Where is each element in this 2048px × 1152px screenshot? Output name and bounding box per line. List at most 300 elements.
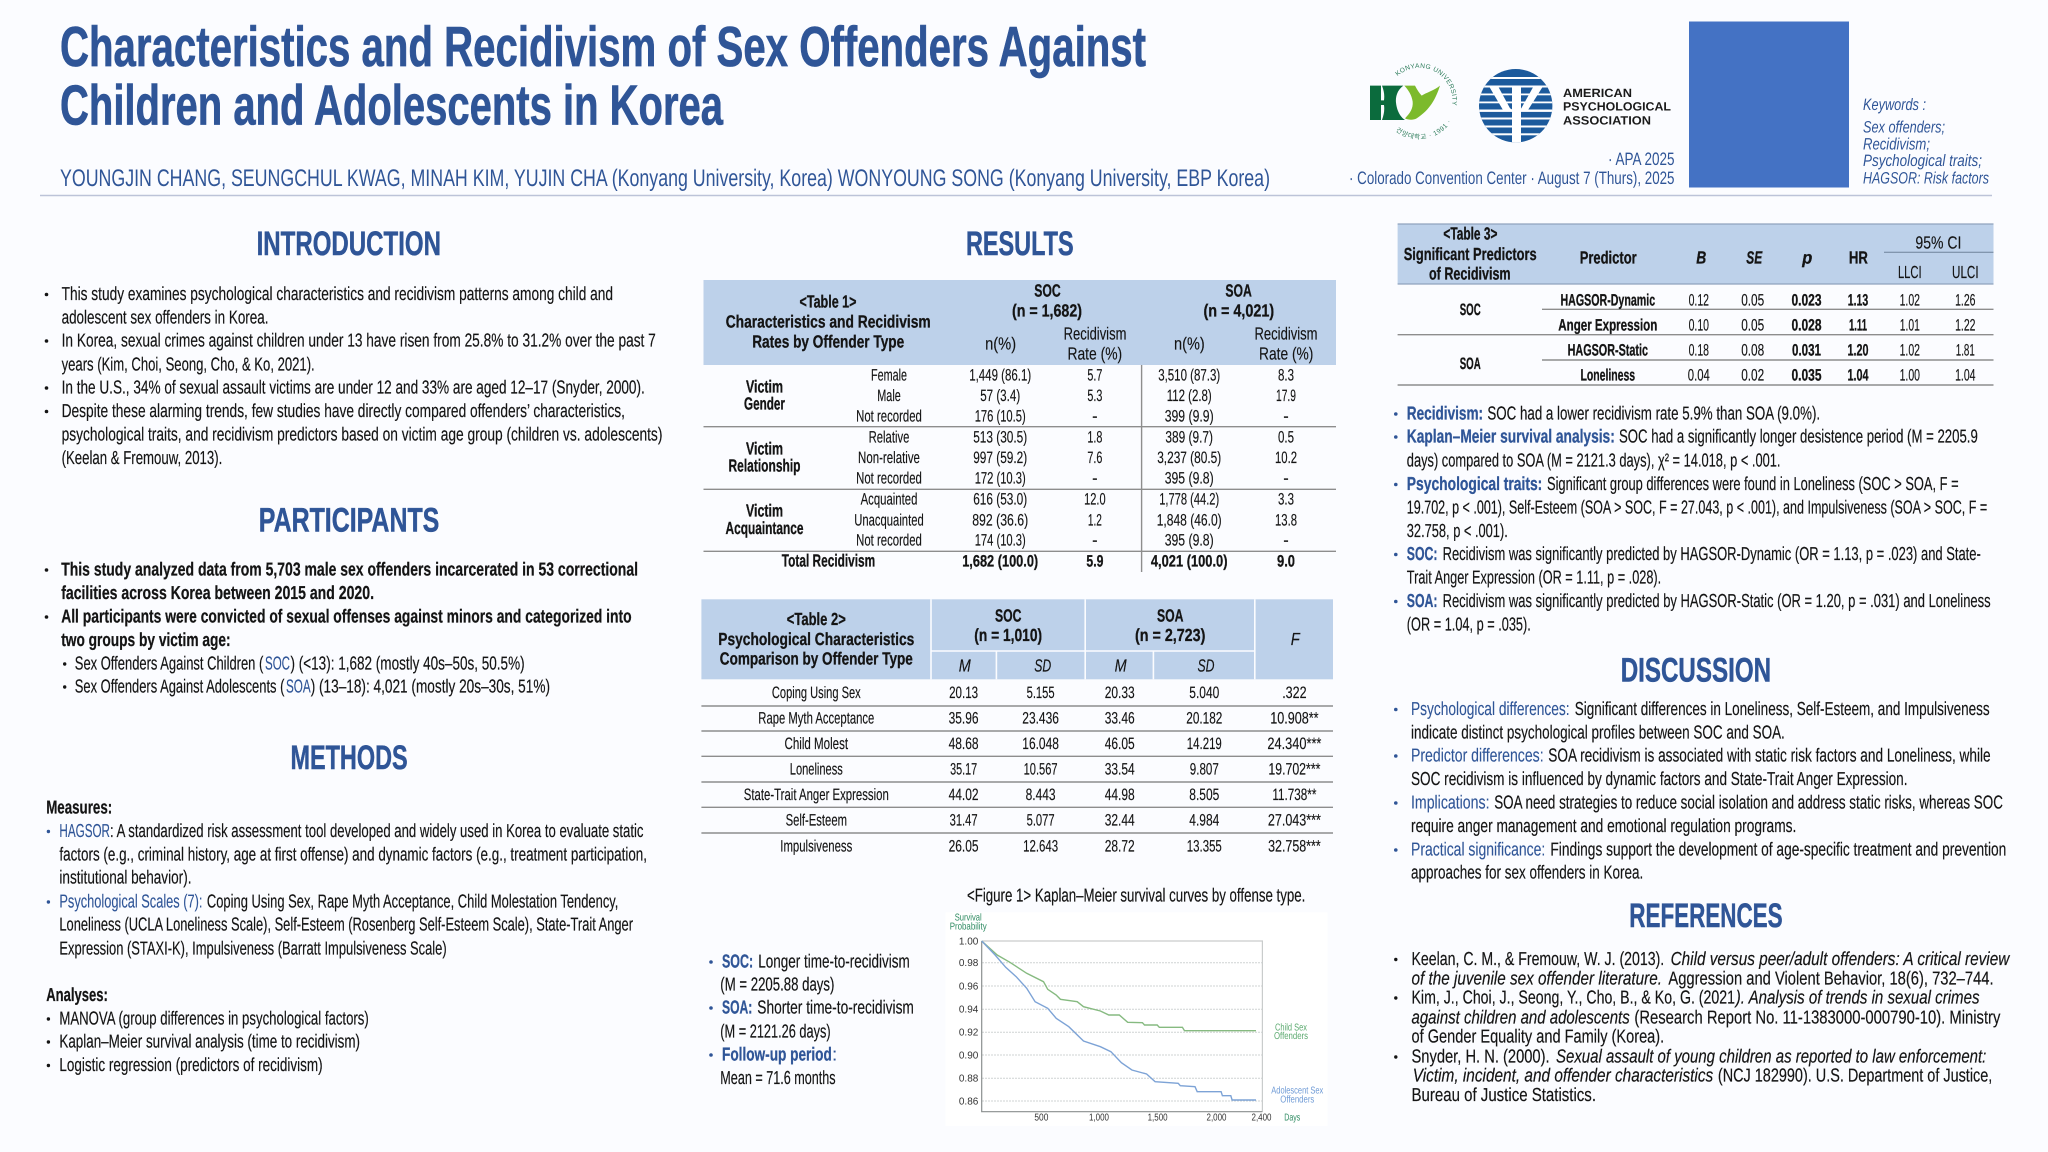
table 2: psychological characteristics comparison: 5.077	[1027, 812, 1055, 830]
text block: participants bullets: ) (13–18): 4,021 (mostly 20s–30s, 51%)	[311, 676, 550, 697]
table 2: psychological characteristics comparison: 28.72	[1105, 837, 1135, 855]
text block: measures: Psychological Scales (7):	[59, 890, 203, 911]
keywords: Recidivism;	[1863, 136, 1930, 154]
text block: analyses: Logistic regression (predictors of recidivism)	[59, 1054, 323, 1075]
text block: participants bullets: SOC	[265, 652, 290, 673]
text block: introduction bullets	[45, 283, 662, 468]
table 1: characteristics and recidivism rates: 174 (10.3)	[975, 532, 1026, 550]
table 1: characteristics and recidivism rates: 1.2	[1088, 511, 1102, 529]
table 1: characteristics and recidivism rates: Non-relative	[858, 449, 920, 467]
table 3: significant predictors of recidivism: 95% CI	[1915, 232, 1961, 252]
title: Characteristics and Recidivism of Sex Offenders Against	[60, 15, 1146, 78]
icon: Konyang University logo	[1370, 63, 1457, 140]
table 3: significant predictors of recidivism: ULCI	[1952, 262, 1979, 282]
table 1: characteristics and recidivism rates: Victim	[746, 439, 783, 459]
text block: analyses	[46, 984, 369, 1075]
text block: participants bullets	[45, 559, 638, 697]
table 3: significant predictors of recidivism: 1.11	[1849, 316, 1867, 334]
text block: survival summary: SOC:	[722, 950, 753, 971]
table 2: psychological characteristics comparison	[701, 599, 1333, 855]
table 1: characteristics and recidivism rates: Not recorded	[856, 470, 922, 488]
table 2: psychological characteristics comparison: 26.05	[949, 837, 979, 855]
table 1: characteristics and recidivism rates: Male	[877, 387, 901, 405]
table 1: characteristics and recidivism rates: Recidivism	[1254, 323, 1318, 343]
text block: results bullets: Psychological traits:	[1407, 473, 1542, 494]
text block: discussion bullets	[1394, 698, 2006, 883]
table 3: significant predictors of recidivism: 0.035	[1792, 367, 1822, 385]
keywords	[1863, 96, 1989, 187]
table 3: significant predictors of recidivism: 0.12	[1689, 291, 1709, 309]
keywords: Sex offenders;	[1863, 119, 1945, 137]
table 2: psychological characteristics comparison: State-Trait Anger Expression	[744, 786, 889, 804]
table 1: characteristics and recidivism rates: -	[1092, 532, 1098, 550]
table 1: characteristics and recidivism rates: 892 (36.6)	[972, 511, 1028, 529]
table 2: psychological characteristics comparison: Coping Using Sex	[772, 684, 861, 702]
series label: child sex offenders: Offenders	[1274, 1031, 1308, 1042]
green curve: child sex offenders	[982, 941, 1256, 1031]
table 3: significant predictors of recidivism: <Table 3>	[1443, 223, 1497, 243]
text block: measures: factors (e.g., criminal history, age at first offense) and dynamic factors (e.g., treatment participation,	[59, 843, 647, 864]
table 1: characteristics and recidivism rates: Unacquainted	[854, 511, 924, 529]
table 1: characteristics and recidivism rates: Female	[871, 366, 907, 384]
text block: results bullets: Kaplan–Meier survival analysis:	[1407, 426, 1615, 447]
table 2: psychological characteristics comparison: SD	[1034, 655, 1051, 675]
table 1: characteristics and recidivism rates: Victim	[746, 501, 783, 521]
table 2: psychological characteristics comparison: 9.807	[1190, 761, 1219, 779]
icon: American Psychological Association logo: ASSOCIATION	[1563, 114, 1651, 128]
table 2: psychological characteristics comparison: 48.68	[949, 735, 979, 753]
text block: participants bullets: ) (<13): 1,682 (mostly 40s–50s, 50.5%)	[290, 652, 525, 673]
table 1: characteristics and recidivism rates: 0.5	[1278, 428, 1294, 446]
icon: Konyang University logo: 건양대학교 · 1991 ·	[1396, 121, 1450, 140]
table 1: characteristics and recidivism rates: -	[1092, 470, 1098, 488]
table 3: significant predictors of recidivism: 0.04	[1688, 367, 1710, 385]
table 2: psychological characteristics comparison: 8.505	[1189, 786, 1219, 804]
table 1: characteristics and recidivism rates: 1,778 (44.2)	[1159, 490, 1219, 508]
table 2: psychological characteristics comparison: F	[1291, 629, 1301, 649]
figure caption: <Figure 1> Kaplan–Meier survival curves by offense type.	[967, 885, 1305, 906]
text block: measures: Coping Using Sex, Rape Myth Acceptance, Child Molestation Tendency,	[207, 890, 618, 911]
y axis labels: 0.96	[959, 982, 979, 992]
blue curve: adolescent sex offenders	[982, 941, 1256, 1100]
text block: participants bullets: Sex Offenders Against Children (	[75, 652, 264, 673]
table 2: psychological characteristics comparison: M	[1115, 655, 1127, 675]
series label: adolescent sex offenders	[1271, 1086, 1323, 1105]
table 1: characteristics and recidivism rates: 3,510 (87.3)	[1158, 366, 1220, 384]
table 3: significant predictors of recidivism: LLCI	[1898, 262, 1922, 282]
table 1: characteristics and recidivism rates: Recidivism	[1064, 323, 1126, 343]
text block: survival summary: Follow-up period	[722, 1044, 832, 1065]
table 3: significant predictors of recidivism: HAGSOR-Dynamic	[1560, 291, 1655, 309]
table 3: significant predictors of recidivism: 0.08	[1741, 342, 1764, 360]
table 3: significant predictors of recidivism: SOC	[1460, 301, 1481, 319]
table 2: psychological characteristics comparison: SD	[1198, 655, 1215, 675]
authors: YOUNGJIN CHANG, SEUNGCHUL KWAG, MINAH KIM, YUJIN CHA (Konyang University, Korea) WONYOUNG SONG (Konyang University, EBP Korea)	[60, 165, 1270, 192]
series label: child sex offenders	[1274, 1022, 1308, 1042]
x axis labels	[1034, 1113, 1300, 1124]
table 1: characteristics and recidivism rates: -	[1283, 408, 1289, 426]
table 3: significant predictors of recidivism: 0.05	[1741, 291, 1764, 309]
text block: discussion bullets: Psychological differences:	[1411, 698, 1570, 719]
table 2: psychological characteristics comparison: (n = 1,010)	[974, 625, 1042, 645]
table 1: characteristics and recidivism rates: 616 (53.0)	[973, 490, 1027, 508]
table 2: psychological characteristics comparison: 33.46	[1105, 709, 1135, 727]
blue rectangle placeholder	[1689, 22, 1849, 188]
table 2: psychological characteristics comparison: SOC	[995, 606, 1022, 626]
table 2: psychological characteristics comparison: 35.96	[949, 709, 979, 727]
text block: reference list: against children and adolescents	[1412, 1006, 1630, 1027]
heading: introduction: INTRODUCTION	[257, 225, 441, 263]
text block: results bullets: days) compared to SOA (M = 2121.3 days), χ² = 14.018, p < .001.	[1407, 449, 1780, 470]
text block: reference list: of Gender Equality and Family (Korea).	[1412, 1026, 1664, 1047]
y axis labels	[959, 936, 979, 1108]
table 3: significant predictors of recidivism: SOA	[1460, 355, 1481, 373]
table 3: significant predictors of recidivism: 1.81	[1956, 342, 1975, 360]
heading: participants: PARTICIPANTS	[259, 502, 439, 540]
table 2: psychological characteristics comparison: 20.33	[1105, 684, 1135, 702]
title: Children and Adolescents in Korea	[60, 74, 723, 136]
x axis labels: Days	[1284, 1113, 1300, 1124]
table 1: characteristics and recidivism rates: Victim	[746, 377, 783, 397]
table 2: psychological characteristics comparison: 46.05	[1105, 735, 1135, 753]
table 1: characteristics and recidivism rates: 1,682 (100.0)	[962, 553, 1038, 571]
table 3: significant predictors of recidivism: of Recidivism	[1429, 263, 1511, 283]
keywords: HAGSOR: Risk factors	[1863, 169, 1989, 187]
panel: methods	[46, 739, 647, 1075]
table 3: significant predictors of recidivism: 1.01	[1900, 316, 1920, 334]
chart: Kaplan-Meier survival curves	[946, 912, 1328, 1126]
table 1: characteristics and recidivism rates: Rates by Offender Type	[752, 332, 904, 352]
table 1: characteristics and recidivism rates: -	[1283, 532, 1289, 550]
text block: measures: institutional behavior).	[59, 867, 192, 888]
table 1: characteristics and recidivism rates: 3,237 (80.5)	[1157, 449, 1221, 467]
text block: survival summary: (M = 2205.88 days)	[720, 973, 834, 994]
table 1: characteristics and recidivism rates: n(%)	[985, 333, 1016, 353]
table 1: characteristics and recidivism rates: Not recorded	[856, 408, 922, 426]
text block: analyses: Kaplan–Meier survival analysis (time to recidivism)	[59, 1031, 360, 1052]
table 1: characteristics and recidivism rates: 5.7	[1087, 366, 1102, 384]
table 3: significant predictors of recidivism: 1.04	[1955, 367, 1976, 385]
x axis labels: 500	[1034, 1113, 1049, 1124]
text block: results bullets: Trait Anger Expression (OR = 1.11, p = .028).	[1407, 567, 1661, 588]
table 1: characteristics and recidivism rates: <Table 1>	[800, 292, 856, 312]
table 1: characteristics and recidivism rates: SOC	[1034, 281, 1061, 301]
x axis labels: 1,500	[1148, 1113, 1168, 1124]
table 3: significant predictors of recidivism: 1.04	[1848, 367, 1869, 385]
table 1: characteristics and recidivism rates: 112 (2.8)	[1167, 387, 1212, 405]
table 2: psychological characteristics comparison: Rape Myth Acceptance	[758, 709, 874, 727]
table 1: characteristics and recidivism rates: SOA	[1225, 281, 1252, 301]
table 1: characteristics and recidivism rates: Not recorded	[856, 532, 922, 550]
table 2: psychological characteristics comparison: 10.908**	[1270, 709, 1319, 727]
table 2: psychological characteristics comparison: 32.44	[1105, 812, 1135, 830]
table 1: characteristics and recidivism rates: n(%)	[1174, 333, 1205, 353]
table 1: characteristics and recidivism rates: Rate (%)	[1067, 343, 1122, 363]
table 3: significant predictors of recidivism: 0.031	[1792, 342, 1821, 360]
text block: reference list: Victim, incident, and offender characteristics	[1413, 1065, 1713, 1086]
table 2: psychological characteristics comparison: 20.182	[1186, 709, 1222, 727]
y axis labels: 0.88	[959, 1074, 979, 1084]
table 3: significant predictors of recidivism: B	[1696, 248, 1706, 268]
heading: discussion: DISCUSSION	[1621, 652, 1771, 690]
table 1: characteristics and recidivism rates: Gender	[744, 394, 785, 414]
table 2: psychological characteristics comparison: Self-Esteem	[786, 812, 847, 830]
table 2: psychological characteristics comparison: M	[959, 655, 971, 675]
text block: discussion bullets: indicate distinct psychological profiles between SOC and SOA.	[1411, 721, 1785, 742]
icon: American Psychological Association logo: AMERICAN	[1563, 86, 1632, 100]
table 2: psychological characteristics comparison: 12.643	[1023, 837, 1058, 855]
text block: analyses: MANOVA (group differences in psychological factors)	[59, 1007, 369, 1028]
table 2: psychological characteristics comparison: 23.436	[1022, 709, 1059, 727]
table 3: significant predictors of recidivism: 1.20	[1848, 342, 1868, 360]
table 3: significant predictors of recidivism: 0.18	[1689, 342, 1709, 360]
text block: introduction bullets: (Keelan & Fremouw, 2013).	[62, 447, 222, 468]
text block: participants bullets: two groups by victim age:	[61, 629, 231, 650]
table 2: psychological characteristics comparison: 27.043***	[1268, 812, 1321, 830]
table 1: characteristics and recidivism rates: 399 (9.9)	[1165, 408, 1214, 426]
text block: introduction bullets: In the U.S., 34% of sexual assault victims are under 12 and 33% are aged 12–17 (Snyder, 2000).	[62, 377, 645, 398]
table 2: psychological characteristics comparison: 4.984	[1189, 812, 1219, 830]
table 1: characteristics and recidivism rates: 5.9	[1086, 553, 1103, 571]
text block: introduction bullets: In Korea, sexual crimes against children under 13 have risen from 25.8% to 31.2% over the past 7	[62, 330, 656, 351]
text block: measures: : A standardized risk assessment tool developed and widely used in Korea to evaluate static	[110, 820, 644, 841]
table 1: characteristics and recidivism rates: (n = 4,021)	[1203, 301, 1274, 321]
text block: survival summary: (M = 2121.26 days)	[720, 1020, 831, 1041]
table 1: characteristics and recidivism rates: 395 (9.8)	[1165, 470, 1214, 488]
table 2: psychological characteristics comparison: 11.738**	[1272, 786, 1317, 804]
text block: measures: Loneliness (UCLA Loneliness Scale), Self-Esteem (Rosenberg Self-Esteem Scale), State-Trait Anger	[59, 914, 633, 935]
table 1: characteristics and recidivism rates: Rate (%)	[1259, 343, 1313, 363]
y axis labels: 1.00	[959, 936, 979, 948]
text block: participants bullets: SOA	[286, 676, 311, 697]
table 3: significant predictors of recidivism: HAGSOR-Static	[1568, 342, 1648, 360]
table 2: psychological characteristics comparison: 13.355	[1187, 837, 1222, 855]
table 1: characteristics and recidivism rates: 7.6	[1087, 449, 1102, 467]
text block: measures: HAGSOR	[59, 820, 110, 841]
text block: introduction bullets: psychological traits, and recidivism predictors based on victim age group (children vs. adolescents)	[62, 424, 662, 445]
table 2: psychological characteristics comparison: .322	[1282, 684, 1307, 702]
icon: American Psychological Association logo	[1479, 69, 1671, 143]
table 2: psychological characteristics comparison: 32.758***	[1268, 837, 1321, 855]
text block: reference list	[1394, 948, 2010, 1105]
table 1: characteristics and recidivism rates: (n = 1,682)	[1012, 301, 1082, 321]
icon: American Psychological Association logo: PSYCHOLOGICAL	[1563, 100, 1671, 114]
text block: reference list: Bureau of Justice Statistics.	[1412, 1084, 1596, 1105]
table 1: characteristics and recidivism rates: 172 (10.3)	[975, 470, 1026, 488]
table 1: characteristics and recidivism rates: 3.3	[1278, 490, 1294, 508]
text block: survival summary: Longer time-to-recidivism	[758, 950, 910, 971]
text block: survival summary: :	[832, 1044, 837, 1065]
title	[60, 15, 1146, 136]
text block: introduction bullets: adolescent sex offenders in Korea.	[62, 306, 268, 327]
keywords: Keywords :	[1863, 96, 1926, 114]
text block: discussion bullets: Predictor differences:	[1411, 745, 1544, 766]
text block: survival summary	[709, 950, 914, 1088]
table 2: psychological characteristics comparison: 19.702***	[1268, 761, 1321, 779]
text block: participants bullets: facilities across Korea between 2015 and 2020.	[61, 582, 374, 603]
table 2: psychological characteristics comparison: 8.443	[1026, 786, 1056, 804]
text block: reference list: Kim, J., Choi, J., Seong, Y., Cho, B., & Ko, G. (2021	[1412, 987, 1735, 1008]
table 2: psychological characteristics comparison: Impulsiveness	[780, 837, 852, 855]
table 3: significant predictors of recidivism: 1.13	[1848, 291, 1868, 309]
text block: reference list: ). Analysis of trends in sexual crimes	[1734, 987, 1980, 1008]
text block: analyses: Analyses:	[46, 984, 108, 1005]
table 3: significant predictors of recidivism: Loneliness	[1580, 367, 1635, 385]
table 2: psychological characteristics comparison: 16.048	[1022, 735, 1059, 753]
table 3: significant predictors of recidivism: 0.02	[1741, 367, 1764, 385]
table 3: significant predictors of recidivism: Significant Predictors	[1404, 244, 1537, 264]
y axis labels: 0.90	[959, 1050, 979, 1062]
text block: survival summary: Mean = 71.6 months	[720, 1067, 836, 1088]
table 3: significant predictors of recidivism: 0.10	[1689, 316, 1709, 334]
text block: results bullets: 32.758, p < .001).	[1407, 520, 1508, 541]
text block: reference list: Keelan, C. M., & Fremouw, W. J. (2013).	[1412, 948, 1664, 969]
table 1: characteristics and recidivism rates: 513 (30.5)	[973, 428, 1027, 446]
text block: discussion bullets: Practical significance:	[1411, 838, 1545, 859]
table 1: characteristics and recidivism rates: Acquainted	[861, 490, 917, 508]
table 2: psychological characteristics comparison: Loneliness	[790, 761, 843, 779]
text block: introduction bullets: years (Kim, Choi, Seong, Cho, & Ko, 2021).	[62, 353, 315, 374]
text block: results bullets: SOC had a lower recidivism rate 5.9% than SOA (9.0%).	[1487, 402, 1820, 423]
x axis labels: 2,400	[1252, 1113, 1272, 1124]
text block: results bullets: SOC:	[1407, 543, 1438, 564]
table 1: characteristics and recidivism rates: 1,848 (46.0)	[1157, 511, 1222, 529]
text block: discussion bullets: require anger management and emotional regulation programs.	[1411, 815, 1796, 836]
table 3: significant predictors of recidivism: Predictor	[1580, 248, 1637, 268]
table 1: characteristics and recidivism rates: 1,449 (86.1)	[969, 366, 1031, 384]
table 2: psychological characteristics comparison: 20.13	[949, 684, 978, 702]
text block: participants bullets: All participants were convicted of sexual offenses against minors and categorized into	[61, 606, 632, 627]
table 3: significant predictors of recidivism	[1398, 223, 1994, 385]
table 2: psychological characteristics comparison: 35.17	[950, 761, 977, 779]
table 2: psychological characteristics comparison: 44.98	[1105, 786, 1135, 804]
axis title: Survival	[955, 913, 982, 924]
table 1: characteristics and recidivism rates: -	[1283, 470, 1289, 488]
table 2: psychological characteristics comparison: SOA	[1157, 606, 1184, 626]
table 1: characteristics and recidivism rates: 10.2	[1275, 449, 1297, 467]
table 1: characteristics and recidivism rates: -	[1092, 408, 1098, 426]
table 2: psychological characteristics comparison: Comparison by Offender Type	[720, 649, 913, 669]
text block: discussion bullets: Implications:	[1411, 792, 1490, 813]
table 1: characteristics and recidivism rates	[704, 280, 1336, 572]
table 3: significant predictors of recidivism: 1.02	[1900, 342, 1920, 360]
text block: participants bullets: This study analyzed data from 5,703 male sex offenders incarcerated in 53 correctional	[61, 559, 638, 580]
table 2: psychological characteristics comparison: <Table 2>	[787, 609, 846, 629]
series label: child sex offenders: Child Sex	[1275, 1022, 1307, 1033]
table 2: psychological characteristics comparison: Psychological Characteristics	[718, 629, 915, 649]
table 2: psychological characteristics comparison: Child Molest	[784, 735, 848, 753]
table 2: psychological characteristics comparison: 33.54	[1105, 761, 1135, 779]
y axis labels: 0.94	[959, 1004, 979, 1016]
heading: results: RESULTS	[966, 225, 1074, 263]
icon: Konyang University logo: KONYANG UNIVERSITY	[1395, 63, 1457, 106]
table 3: significant predictors of recidivism: 0.05	[1741, 316, 1764, 334]
panel: discussion	[1394, 652, 2006, 883]
table 3: significant predictors of recidivism: 1.00	[1900, 367, 1920, 385]
table 3: significant predictors of recidivism: SE	[1746, 248, 1763, 268]
series label: adolescent sex offenders: Offenders	[1280, 1094, 1314, 1105]
x axis labels: 2,000	[1206, 1113, 1227, 1124]
text block: reference list: of the juvenile sex offender literature.	[1412, 967, 1662, 988]
table 1: characteristics and recidivism rates: 9.0	[1277, 553, 1295, 571]
conference details: · Colorado Convention Center · August 7 (Thurs), 2025	[1349, 168, 1674, 188]
text block: measures: Measures:	[46, 796, 112, 817]
y axis labels: 0.86	[959, 1096, 979, 1108]
table 2: psychological characteristics comparison: 14.219	[1187, 735, 1222, 753]
heading: methods: METHODS	[290, 739, 408, 777]
table 1: characteristics and recidivism rates: 12.0	[1084, 490, 1106, 508]
x axis labels: 1,000	[1089, 1113, 1109, 1124]
panel: participants	[45, 502, 638, 697]
text block: participants bullets: Sex Offenders Against Adolescents (	[75, 676, 285, 697]
table 1: characteristics and recidivism rates: Relative	[869, 428, 909, 446]
text block: discussion bullets: approaches for sex offenders in Korea.	[1411, 862, 1643, 883]
table 1: characteristics and recidivism rates: 17.9	[1276, 387, 1296, 405]
table 2: psychological characteristics comparison: (n = 2,723)	[1135, 625, 1205, 645]
text block: measures	[46, 796, 647, 958]
text block: introduction bullets: This study examines psychological characteristics and recidivism patterns among child and	[62, 283, 613, 304]
text block: survival summary: SOA:	[722, 997, 752, 1018]
table 2: psychological characteristics comparison: 44.02	[949, 786, 979, 804]
text block: reference list: Snyder, H. N. (2000).	[1412, 1045, 1550, 1066]
table 3: significant predictors of recidivism: HR	[1849, 248, 1868, 268]
table 1: characteristics and recidivism rates: 5.3	[1087, 387, 1102, 405]
table 3: significant predictors of recidivism: 1.02	[1900, 291, 1920, 309]
table 1: characteristics and recidivism rates: 395 (9.8)	[1165, 532, 1214, 550]
table 1: characteristics and recidivism rates: Characteristics and Recidivism	[726, 312, 931, 332]
table 1: characteristics and recidivism rates: 57 (3.4)	[980, 387, 1020, 405]
text block: measures: Expression (STAXI-K), Impulsiveness (Barratt Impulsiveness Scale)	[59, 937, 447, 958]
text block: results bullets: Recidivism:	[1407, 402, 1483, 423]
heading: references: REFERENCES	[1629, 897, 1783, 935]
text block: introduction bullets: Despite these alarming trends, few studies have directly compared offenders’ characteristics,	[62, 400, 625, 421]
table 3: significant predictors of recidivism: 0.028	[1792, 316, 1822, 334]
table 2: psychological characteristics comparison: 24.340***	[1267, 735, 1322, 753]
table 3: significant predictors of recidivism: 1.22	[1955, 316, 1976, 334]
series label: adolescent sex offenders: Adolescent Sex	[1271, 1086, 1323, 1097]
table 1: characteristics and recidivism rates: 997 (59.2)	[973, 449, 1027, 467]
table 3: significant predictors of recidivism: Anger Expression	[1558, 316, 1657, 334]
axis title: Probability	[950, 922, 987, 933]
table 3: significant predictors of recidivism: 1.26	[1955, 291, 1976, 309]
table 3: significant predictors of recidivism: p	[1801, 248, 1813, 268]
table 3: significant predictors of recidivism: 0.023	[1792, 291, 1822, 309]
table 2: psychological characteristics comparison: 5.155	[1027, 684, 1055, 702]
text block: survival summary: Shorter time-to-recidivism	[757, 997, 914, 1018]
table 1: characteristics and recidivism rates: 4,021 (100.0)	[1151, 553, 1227, 571]
table 1: characteristics and recidivism rates: 13.8	[1275, 511, 1297, 529]
table 1: characteristics and recidivism rates: 389 (9.7)	[1165, 428, 1213, 446]
conference details: · APA 2025	[1608, 149, 1674, 169]
table 1: characteristics and recidivism rates: Relationship	[728, 456, 800, 476]
keywords: Psychological traits;	[1863, 152, 1982, 170]
y axis labels: 0.98	[959, 958, 979, 969]
table 1: characteristics and recidivism rates: Acquaintance	[726, 518, 804, 538]
table 2: psychological characteristics comparison: 10.567	[1024, 761, 1058, 779]
text block: results bullets	[1394, 402, 1991, 634]
table 1: characteristics and recidivism rates: 176 (10.5)	[975, 408, 1026, 426]
axis title	[950, 913, 987, 933]
table 1: characteristics and recidivism rates: 1.8	[1087, 428, 1102, 446]
table 1: characteristics and recidivism rates: 8.3	[1278, 366, 1294, 384]
table 2: psychological characteristics comparison: 5.040	[1189, 684, 1219, 702]
panel: references	[1394, 897, 2010, 1105]
text block: results bullets: SOA:	[1407, 590, 1438, 611]
conference details	[1349, 149, 1674, 188]
y axis labels: 0.92	[959, 1028, 979, 1038]
table 1: characteristics and recidivism rates: Total Recidivism	[782, 551, 875, 571]
panel: introduction	[45, 225, 662, 468]
